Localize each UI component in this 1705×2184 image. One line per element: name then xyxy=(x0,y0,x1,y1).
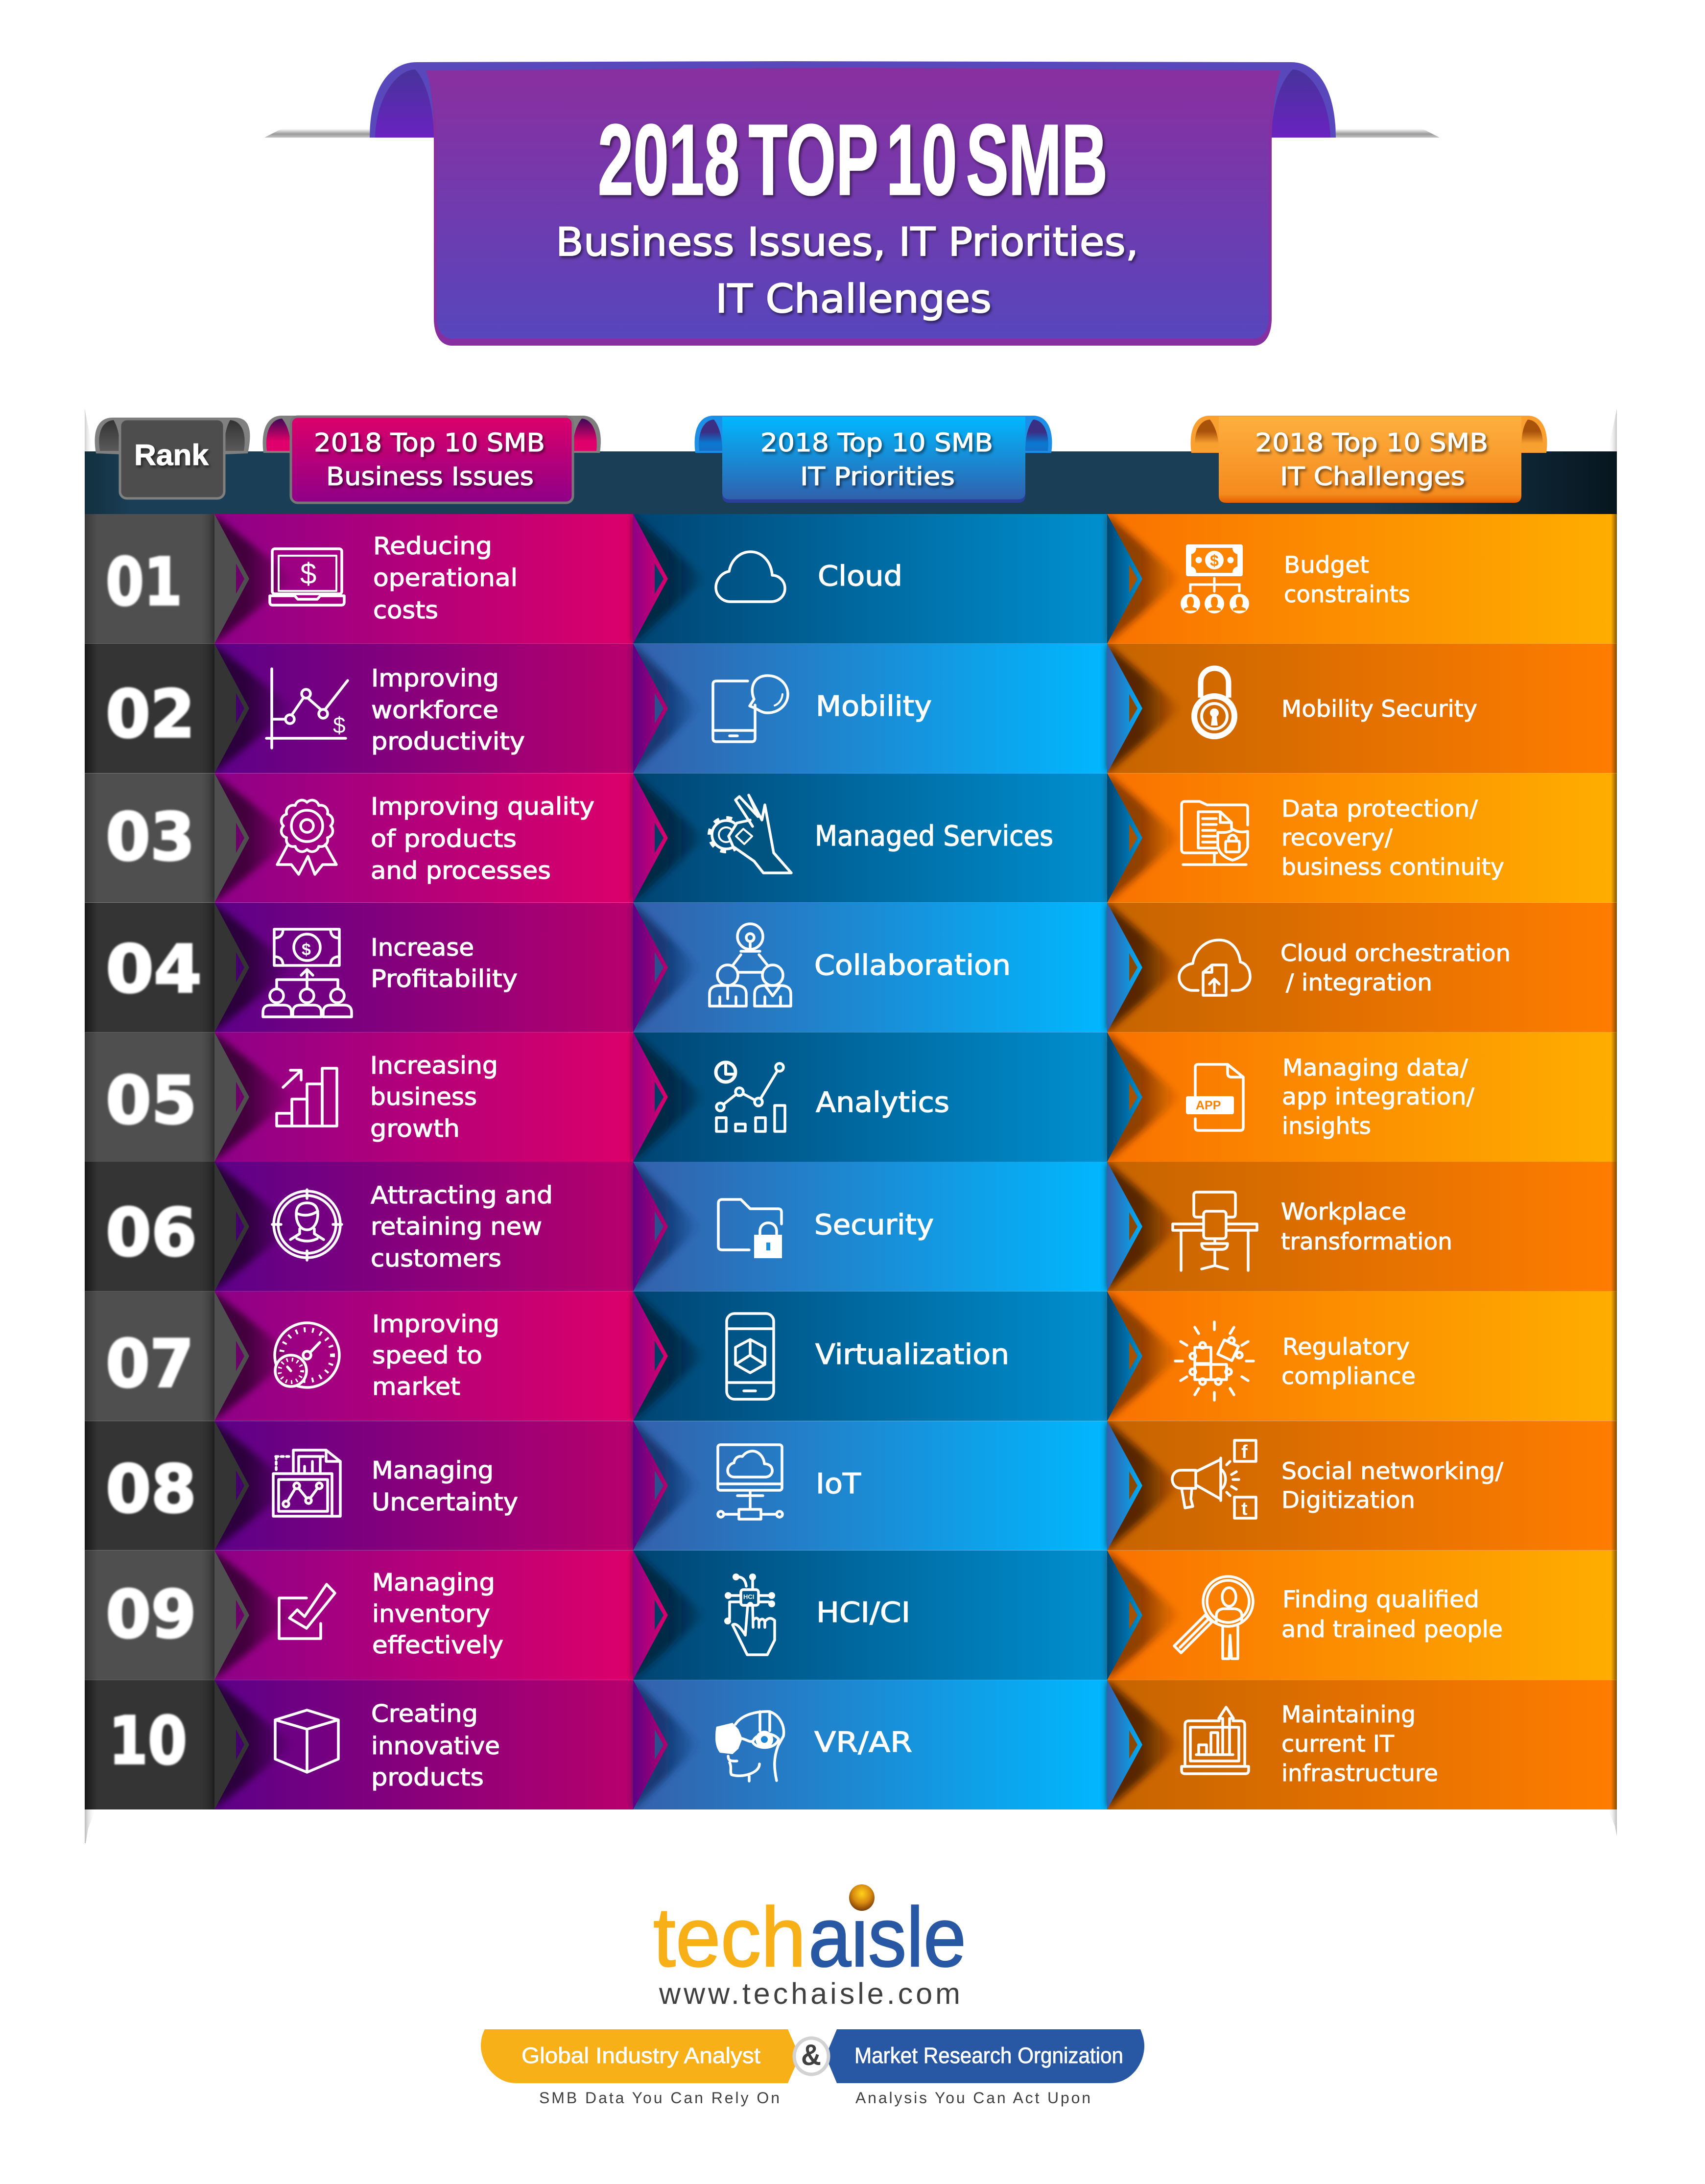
issue 08 text: Managing xyxy=(372,1456,494,1484)
issue 05 text: growth xyxy=(370,1115,460,1143)
challenge 07 text xyxy=(1281,1334,1416,1390)
priority 02 text: Mobility xyxy=(816,690,932,723)
priority 09 text: HCI/CI xyxy=(816,1597,910,1629)
priority 04 text: Collaboration xyxy=(814,949,1011,982)
rank 01: 01 xyxy=(106,544,182,620)
challenge 08 text: Social networking/ xyxy=(1281,1458,1503,1485)
icon: social megaphone: t xyxy=(1241,1499,1248,1519)
issue 09 text: inventory xyxy=(372,1600,490,1628)
challenge 01 text: Budget xyxy=(1284,552,1369,579)
table edge shadows xyxy=(85,409,1617,1843)
icon: infrastructure laptop xyxy=(1182,1707,1249,1774)
challenge 01 text xyxy=(1284,552,1410,608)
icon: app file: APP xyxy=(1196,1099,1221,1112)
challenge 05 text: app integration/ xyxy=(1282,1083,1474,1110)
subtitle line 1: Business Issues, IT Priorities, xyxy=(556,219,1138,265)
issue 07 text: speed to xyxy=(372,1341,482,1369)
challenge 06 text xyxy=(1281,1198,1452,1255)
icon: phone and speech bubble xyxy=(713,676,788,742)
website url: www.techaisle.com xyxy=(659,1977,960,2010)
challenge 03 text xyxy=(1281,796,1504,881)
rank 02: 02 xyxy=(106,676,195,752)
header label: IT Challenges: 2018 Top 10 SMB xyxy=(1255,428,1488,458)
issue 03 text xyxy=(371,793,594,885)
issue 05 text xyxy=(370,1052,498,1143)
issue 05 text: business xyxy=(370,1083,477,1111)
challenge 05 text xyxy=(1282,1055,1474,1140)
priority 05 text: Analytics xyxy=(816,1086,949,1119)
issue 09 text: effectively xyxy=(372,1631,503,1659)
ampersand badge: & xyxy=(801,2039,821,2071)
row 02 background xyxy=(85,644,1617,773)
priority 10 text: VR/AR xyxy=(814,1726,912,1759)
badge: Global Industry Analyst: Global Industry Analyst xyxy=(521,2043,761,2068)
challenge 03 text: business continuity xyxy=(1281,854,1504,881)
row 03 background xyxy=(85,773,1617,903)
icon: magnifier and person xyxy=(1174,1576,1253,1659)
issue 01 text xyxy=(373,532,518,624)
icon: checkbox xyxy=(279,1584,335,1639)
icon: quality rosette xyxy=(277,800,336,874)
issue 07 text: Improving xyxy=(372,1310,499,1338)
header band xyxy=(85,451,1617,514)
icon: cube xyxy=(275,1710,338,1772)
issue 10 text: products xyxy=(371,1763,484,1791)
icon: collaboration xyxy=(710,924,791,1006)
priority 01 text: Cloud xyxy=(818,560,902,592)
logo: techaisle: aisle xyxy=(808,1890,966,1984)
logo: techaisle: tech xyxy=(653,1890,806,1984)
challenge 08 text: Digitization xyxy=(1281,1487,1415,1514)
tagline right: Analysis You Can Act Upon xyxy=(855,2089,1090,2107)
challenge 10 text xyxy=(1281,1701,1438,1787)
badge: Market Research Orgnization xyxy=(826,2029,1144,2083)
issue 04 text: Increase xyxy=(371,934,474,962)
icon: speed gauge xyxy=(275,1323,339,1387)
challenge 06 text: Workplace xyxy=(1281,1198,1406,1225)
row 08 background xyxy=(85,1421,1617,1550)
row 07 background xyxy=(85,1292,1617,1421)
header ribbon: IT Challenges xyxy=(1191,416,1547,503)
header label: IT Priorities: 2018 Top 10 SMB xyxy=(760,428,993,458)
header label: Business Issues: 2018 Top 10 SMB xyxy=(314,428,545,458)
row 05 background xyxy=(85,1032,1617,1162)
icon: app file xyxy=(1186,1064,1243,1130)
challenge 08 text xyxy=(1281,1458,1503,1514)
icon: data protection xyxy=(1182,801,1248,865)
rank numbers xyxy=(106,544,202,1779)
issue 04 text xyxy=(371,934,518,993)
issue 06 text: Attracting and xyxy=(371,1181,553,1209)
issue 06 text: customers xyxy=(371,1245,501,1272)
issue 02 text: productivity xyxy=(371,728,525,755)
icon: hand and gear xyxy=(710,795,791,873)
panel: business issues text xyxy=(370,532,594,1791)
challenge 09 text: Finding qualified xyxy=(1282,1586,1479,1613)
icon: workforce chart: $ xyxy=(333,712,346,738)
issue 10 text: Creating xyxy=(371,1700,478,1728)
icon: social megaphone: f xyxy=(1241,1442,1248,1462)
icon: cloud upload document xyxy=(1179,940,1250,995)
icon: social megaphone xyxy=(1172,1440,1256,1519)
logo: techaisle xyxy=(653,1884,966,1984)
row 09 background xyxy=(85,1550,1617,1680)
issue 01 text: operational xyxy=(373,564,518,592)
title text: 2018 TOP 10 SMB xyxy=(598,104,1108,216)
challenge 02 text: Mobility Security xyxy=(1281,696,1477,723)
badge: Market Research Orgnization: Market Research Orgnization xyxy=(854,2043,1123,2068)
header ribbon: Business Issues xyxy=(263,416,601,503)
header label: IT Priorities xyxy=(760,428,993,492)
header label: IT Challenges: IT Challenges xyxy=(1280,462,1465,492)
icon: laptop with dollar xyxy=(270,549,344,605)
icon: customer target xyxy=(272,1190,342,1260)
icon: workforce chart xyxy=(266,669,348,748)
issue 05 text: Increasing xyxy=(370,1052,498,1080)
issue 07 text: market xyxy=(372,1373,460,1401)
subtitle line 2: IT Challenges xyxy=(715,276,992,322)
issue 10 text xyxy=(371,1700,500,1791)
icon: padlock xyxy=(1194,668,1234,736)
header label: Rank: Rank xyxy=(134,439,209,471)
issue 08 text xyxy=(372,1456,518,1516)
rank 06: 06 xyxy=(106,1195,197,1271)
icon: laptop with dollar: $ xyxy=(300,557,316,590)
row 04 background xyxy=(85,903,1617,1032)
challenge 06 text: transformation xyxy=(1281,1228,1452,1255)
issue 06 text: retaining new xyxy=(371,1213,542,1241)
panel: IT priorities text xyxy=(814,560,1053,1759)
issue 04 text: Profitability xyxy=(371,965,518,993)
row 01 background xyxy=(85,514,1617,644)
issue 09 text xyxy=(372,1569,503,1659)
issue 06 text xyxy=(371,1181,553,1272)
challenge 04 text: Cloud orchestration xyxy=(1280,940,1511,967)
issue 09 text: Managing xyxy=(372,1569,495,1597)
icon: growth bars xyxy=(277,1068,337,1126)
icon: uncertainty charts xyxy=(273,1450,340,1516)
challenge 05 text: insights xyxy=(1282,1113,1371,1140)
rank 03: 03 xyxy=(106,799,195,875)
icon: workplace desk xyxy=(1173,1192,1257,1270)
priority 07 text: Virtualization xyxy=(815,1339,1009,1371)
header label: Business Issues: Business Issues xyxy=(326,462,534,492)
challenge 10 text: Maintaining xyxy=(1281,1701,1416,1728)
challenge 01 text: constraints xyxy=(1284,581,1410,608)
priority 06 text: Security xyxy=(814,1209,934,1241)
challenge 09 text xyxy=(1281,1586,1503,1643)
challenge 04 text xyxy=(1280,940,1511,996)
icon: regulatory puzzle xyxy=(1175,1322,1254,1400)
issue 08 text: Uncertainty xyxy=(372,1488,518,1516)
title banner xyxy=(264,61,1440,346)
priority 03 text: Managed Services xyxy=(815,820,1053,852)
icon: secure folder xyxy=(718,1199,782,1258)
challenge 05 text: Managing data/ xyxy=(1282,1055,1468,1081)
tagline left: SMB Data You Can Rely On xyxy=(539,2089,780,2107)
icon: cash and people: $ xyxy=(302,940,311,959)
challenge 04 text: / integration xyxy=(1286,969,1432,996)
challenge 03 text: recovery/ xyxy=(1281,824,1393,851)
issue 02 text xyxy=(371,664,525,755)
icon: analytics xyxy=(716,1062,785,1131)
header label: IT Challenges xyxy=(1255,428,1488,492)
icon: virtualization phone xyxy=(727,1314,774,1399)
issue 01 text: costs xyxy=(373,596,438,624)
challenge 10 text: infrastructure xyxy=(1281,1760,1438,1787)
challenge 09 text: and trained people xyxy=(1281,1616,1503,1643)
rank 08: 08 xyxy=(106,1451,196,1527)
ampersand badge xyxy=(794,2038,829,2074)
badge: Global Industry Analyst xyxy=(481,2029,800,2083)
priority 08 text: IoT xyxy=(816,1468,861,1500)
challenge 07 text: Regulatory xyxy=(1282,1334,1410,1361)
issue 03 text: Improving quality xyxy=(371,793,594,821)
icon: VR headset xyxy=(715,1712,784,1781)
issue 07 text xyxy=(372,1310,499,1401)
icon: cash and people xyxy=(263,929,352,1017)
panel: IT challenges text xyxy=(1280,552,1511,1787)
issue 02 text: Improving xyxy=(371,664,499,692)
header ribbon: Rank xyxy=(95,418,250,498)
icon: HCI touch xyxy=(724,1573,775,1655)
issue 10 text: innovative xyxy=(371,1732,500,1760)
row 10 background xyxy=(85,1680,1617,1809)
header label: IT Priorities: IT Priorities xyxy=(800,462,955,492)
icon: budget cash and people: $ xyxy=(1210,552,1219,569)
logo ball xyxy=(849,1884,875,1911)
icon: IoT monitor xyxy=(718,1445,782,1519)
icon: cloud xyxy=(716,552,785,602)
rank 07: 07 xyxy=(106,1326,194,1402)
issue 03 text: of products xyxy=(371,825,517,853)
issue 01 text: Reducing xyxy=(373,532,492,560)
rank 10: 10 xyxy=(109,1703,187,1779)
rank 05: 05 xyxy=(106,1062,197,1139)
icon: budget cash and people xyxy=(1181,544,1249,613)
rank 04: 04 xyxy=(106,931,202,1008)
rank 09: 09 xyxy=(106,1576,196,1653)
header ribbon: IT Priorities xyxy=(695,416,1052,503)
header label: Business Issues xyxy=(314,428,545,492)
challenge 10 text: current IT xyxy=(1281,1731,1394,1758)
issue 03 text: and processes xyxy=(371,857,551,885)
challenge 07 text: compliance xyxy=(1281,1363,1416,1390)
challenge 03 text: Data protection/ xyxy=(1281,796,1478,822)
row 06 background xyxy=(85,1162,1617,1292)
icon: HCI touch: HCI xyxy=(743,1593,754,1600)
issue 02 text: workforce xyxy=(371,696,498,724)
